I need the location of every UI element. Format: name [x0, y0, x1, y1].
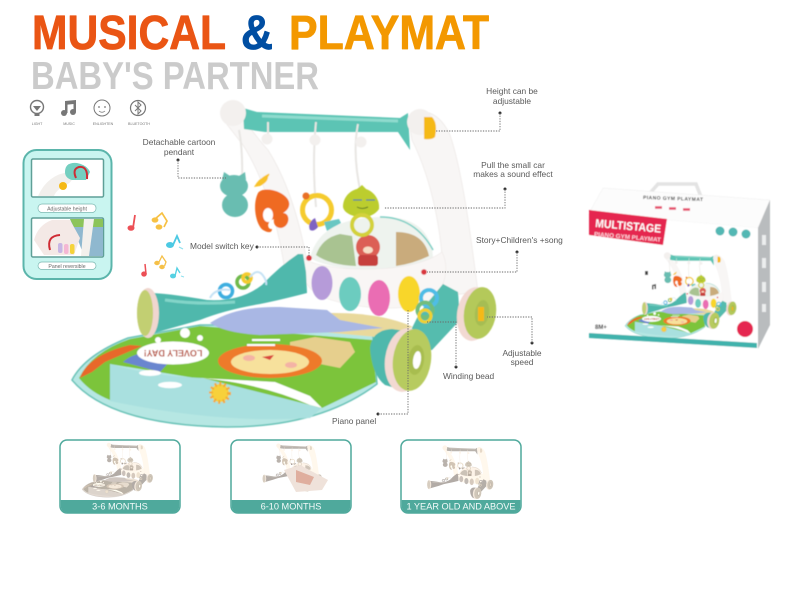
callout: winding bead	[427, 322, 495, 381]
box age label: 8M+	[595, 325, 607, 331]
callout: model switch key: Model switch key	[190, 241, 255, 251]
callout: height can be adjustable: adjustable	[493, 96, 531, 106]
card: 3-6 months: 3-6 MONTHS	[92, 502, 148, 512]
callout: adjustable speed	[487, 317, 542, 367]
note: red small	[141, 264, 147, 277]
card: 1 year old and above: 1 YEAR OLD AND ABOVE	[406, 502, 516, 512]
callout: story and song	[427, 235, 563, 272]
thumbnail: adjustable height	[32, 159, 104, 197]
feature icons row	[30, 100, 150, 126]
pendant: orange rattle	[254, 174, 289, 232]
title: musical and playmat: &	[241, 7, 273, 60]
box top red marks	[655, 208, 690, 210]
red switch dots	[306, 255, 312, 261]
title: musical and playmat: PLAYMAT	[289, 7, 489, 60]
back right wheel	[453, 285, 499, 343]
button: teal	[339, 277, 361, 311]
panel: adjustable features	[24, 150, 112, 279]
right base	[400, 284, 460, 352]
button: yellow	[398, 276, 420, 312]
callout: pull the small car: makes a sound effect	[473, 169, 553, 179]
callout: pull the small car: Pull the small car	[481, 160, 545, 170]
pendant: green chick	[343, 185, 379, 235]
note: red large	[128, 215, 135, 231]
callout: story and song: Story+Children's +song	[476, 235, 563, 245]
box top face	[589, 188, 770, 228]
box red banner: PIANO GYM PLAYMAT	[594, 232, 661, 244]
callout: adjustable speed: speed	[511, 357, 534, 367]
note: cyan large	[166, 236, 183, 249]
icon: enlighten baby face: ENLIGHTEN	[93, 122, 114, 126]
bead rings left	[210, 272, 266, 298]
callout: adjustable speed: Adjustable	[502, 348, 542, 358]
note: yellow large	[152, 213, 167, 230]
bear in dome	[356, 235, 380, 266]
callout: detachable cartoon pendant: pendant	[164, 147, 195, 157]
callout: height can be adjustable	[436, 86, 538, 131]
product box	[589, 184, 770, 349]
left arch	[222, 114, 308, 272]
card: 3-6 months	[60, 440, 180, 513]
walker	[137, 100, 499, 394]
pill: adjustable height label: Adjustable height	[47, 207, 87, 213]
box red badge	[737, 321, 753, 337]
icon: light: LIGHT	[32, 122, 43, 126]
callout: height can be adjustable: Height can be	[486, 86, 538, 96]
box side face	[758, 200, 770, 349]
height knob	[424, 117, 436, 139]
play mat: LOVELY DAY!	[144, 348, 202, 358]
winding bead rings	[418, 290, 437, 322]
callout: detachable cartoon pendant	[143, 137, 226, 178]
note: cyan small	[170, 268, 184, 278]
button: pink	[368, 280, 390, 316]
icon: music: MUSIC	[63, 122, 75, 126]
card: 1 year old and above	[401, 440, 521, 513]
piano dome	[310, 217, 433, 270]
callout: winding bead: Winding bead	[443, 371, 495, 381]
icon: bluetooth: BLUETOOTH	[128, 122, 150, 126]
box feature icons	[716, 226, 750, 238]
left front tube	[143, 254, 307, 335]
box top label: PIANO GYM PLAYMAT	[643, 195, 703, 203]
frame bar	[243, 108, 410, 150]
product: baby gym mat and walker	[72, 100, 499, 427]
callout: model switch key	[190, 241, 309, 256]
callout: piano panel: Piano panel	[332, 416, 376, 426]
hanging straps	[239, 122, 361, 207]
box red banner: MULTISTAGE	[595, 218, 662, 236]
subtitle: baby's partner: BABY'S PARTNER	[31, 55, 319, 98]
left wheel	[137, 288, 159, 338]
pill: panel reversible label: Panel reversible	[48, 264, 86, 270]
title: musical and playmat: MUSICAL	[32, 7, 226, 60]
play mat	[72, 307, 413, 427]
callout: pull the small car	[384, 160, 553, 208]
right arch	[408, 112, 478, 296]
card: 6-10 months	[231, 440, 351, 513]
box product image	[625, 252, 737, 338]
note: yellow small	[154, 256, 166, 269]
front right wheel	[381, 326, 435, 394]
pendant: bear	[220, 172, 248, 217]
front wheel teal hub	[370, 329, 412, 390]
button: purple	[312, 266, 332, 300]
box handle	[651, 184, 703, 202]
piano body	[301, 252, 446, 308]
callout: detachable cartoon pendant: Detachable cartoon	[143, 137, 216, 147]
music notes	[128, 213, 184, 278]
box red banner	[589, 210, 667, 245]
thumbnail: panel reversible	[32, 218, 104, 257]
callout: piano panel	[332, 310, 408, 426]
box music notes	[645, 271, 656, 290]
card: 6-10 months: 6-10 MONTHS	[261, 502, 321, 512]
box teal stripe	[589, 333, 757, 348]
box front face	[589, 213, 758, 349]
pendant: yellow ring	[302, 192, 341, 231]
title: musical and playmat	[32, 7, 489, 60]
